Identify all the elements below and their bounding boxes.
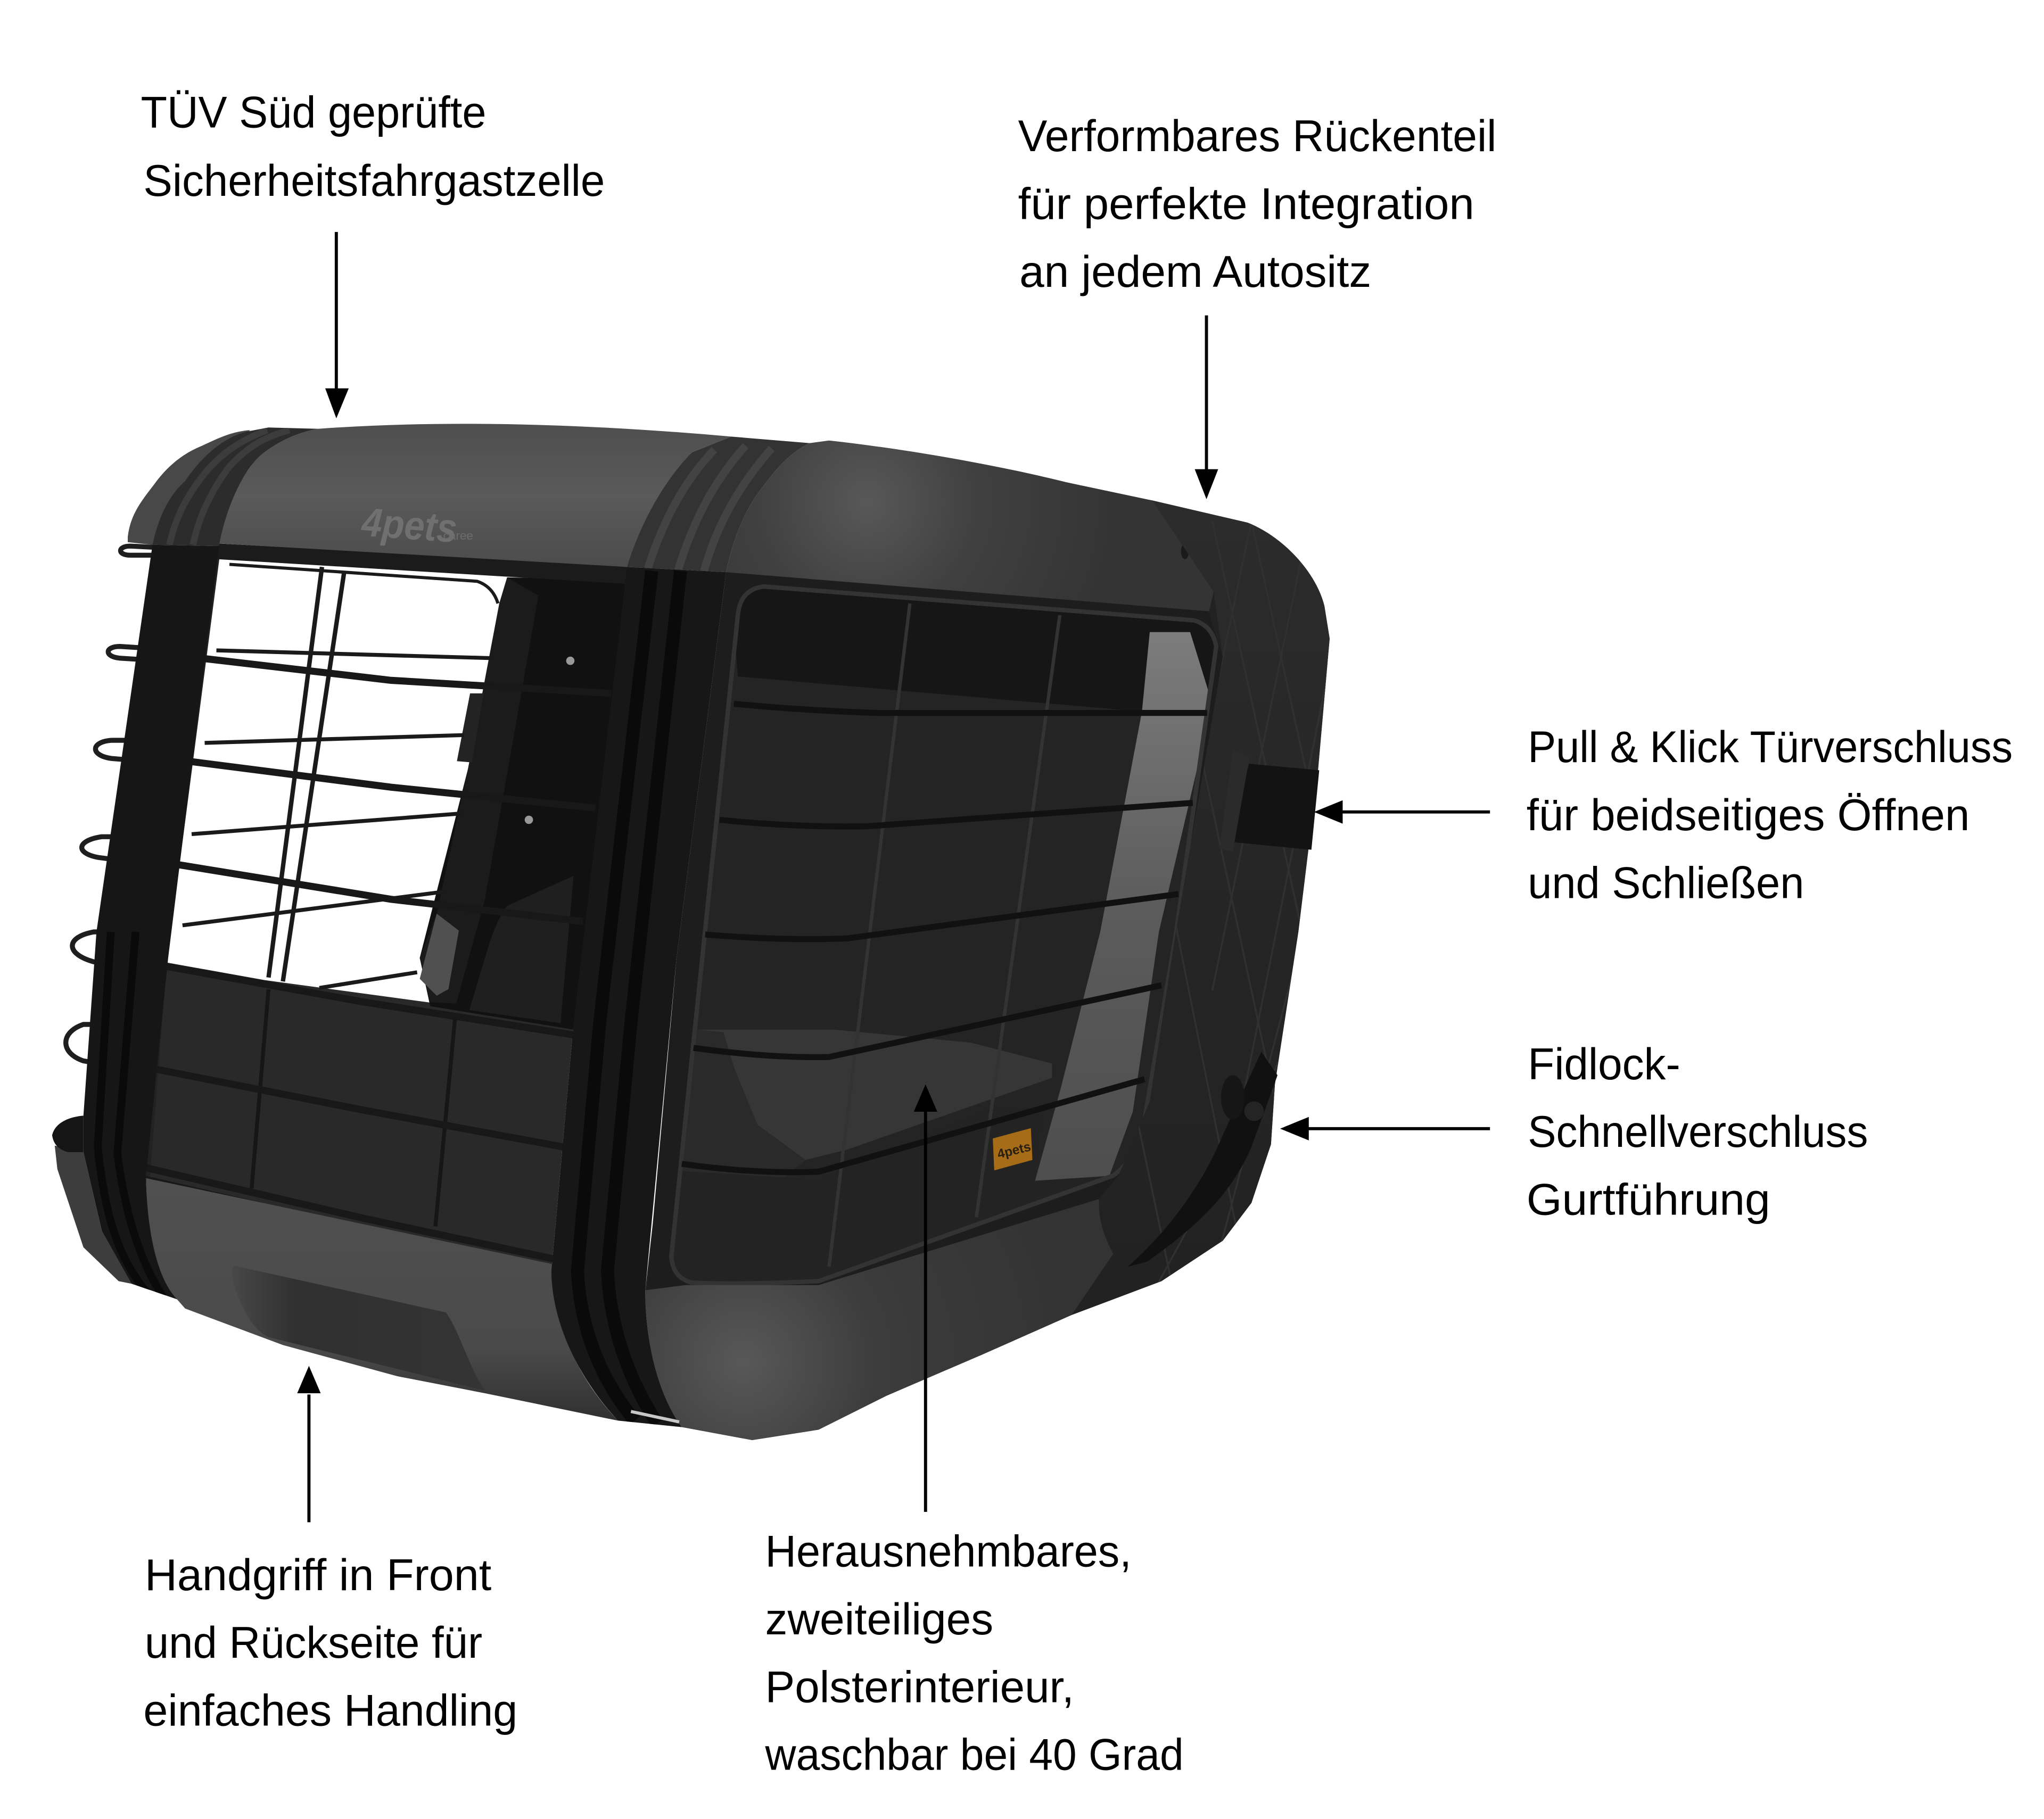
rear grille bars seen through window <box>183 564 498 988</box>
arrow: to handle <box>297 1366 320 1522</box>
small vent hole <box>1181 543 1189 559</box>
label: removable cushion: Polsterinterieur, <box>765 1661 1074 1711</box>
label: pull and click door lock: und Schließen <box>1528 857 1804 907</box>
label: handle <box>143 1550 517 1735</box>
left strap band lower <box>84 545 219 1301</box>
door window interior <box>682 632 1208 1181</box>
door and fabric base <box>647 572 1223 1293</box>
label: handle: einfaches Handling <box>143 1685 517 1735</box>
side panel with diamond pattern <box>1072 500 1342 1315</box>
4pets logo: caree <box>443 529 473 542</box>
orange tag: 4pets <box>996 1139 1032 1162</box>
label: Fidlock belt guide <box>1527 1039 1868 1224</box>
metal sliver at the base <box>631 1411 679 1422</box>
handle recess <box>232 1266 485 1391</box>
right bottom grey panel <box>645 1199 1113 1440</box>
crate illustration <box>52 424 1342 1440</box>
arrow: to safety cell <box>325 232 349 418</box>
front grille horizontal bars <box>146 658 612 1268</box>
left strap band upper <box>153 427 318 546</box>
label: pull and click door lock <box>1527 722 2013 907</box>
left bottom corner and clip <box>52 1115 131 1284</box>
label: deformable back panel: an jedem Autositz <box>1019 246 1371 296</box>
label: TÜV Süd certified cell: Sicherheitsfahrgastzelle <box>143 155 605 205</box>
interior pillar behind the front window <box>420 577 628 1030</box>
right side underlay <box>645 443 1330 1382</box>
door frame <box>671 586 1216 1284</box>
label: pull and click door lock: für beidseitiges Öffnen <box>1527 790 1969 840</box>
label: Fidlock belt guide: Fidlock- <box>1528 1039 1680 1089</box>
arrow: to back panel <box>1194 316 1218 499</box>
centre strap band lower <box>551 567 726 1427</box>
label: deformable back panel: für perfekte Integration <box>1018 178 1474 228</box>
label: deformable back panel: Verformbares Rückenteil <box>1018 111 1496 161</box>
arrow: to pull strap <box>1314 800 1490 824</box>
label: deformable back panel <box>1018 111 1496 296</box>
label: removable cushion <box>765 1526 1184 1780</box>
label: Fidlock belt guide: Gurtführung <box>1527 1174 1770 1224</box>
front lower panel fabric <box>146 962 574 1271</box>
right top grey panel <box>726 441 1214 611</box>
centre strap band upper <box>627 436 810 572</box>
Fidlock strap and buckle <box>1127 1052 1278 1267</box>
pull strap door lock <box>1219 749 1319 851</box>
side loops of the front grille <box>66 546 156 1063</box>
arrow: to Fidlock buckle <box>1280 1117 1490 1140</box>
label: pull and click door lock: Pull & Klick Türverschluss <box>1528 722 2013 772</box>
door grille vertical bars <box>829 603 1060 1267</box>
label: removable cushion: zweiteiliges <box>765 1594 993 1644</box>
label: handle: Handgriff in Front <box>145 1550 491 1600</box>
front window frame <box>146 551 455 1227</box>
front bottom panel <box>146 1178 618 1420</box>
label: removable cushion: waschbar bei 40 Grad <box>765 1730 1184 1780</box>
label: handle: und Rückseite für <box>145 1617 482 1667</box>
strip under the top panel <box>217 543 627 584</box>
left grey cap <box>128 430 250 545</box>
4pets logo: 4pets <box>359 500 458 551</box>
top grey panel <box>219 424 731 567</box>
orange tag <box>993 1128 1033 1170</box>
arrow: to cushion <box>914 1085 937 1512</box>
label: TÜV Süd certified cell: TÜV Süd geprüfte <box>141 87 486 137</box>
label: removable cushion: Herausnehmbares, <box>765 1526 1132 1576</box>
label: Fidlock belt guide: Schnellverschluss <box>1528 1106 1868 1156</box>
cushion <box>696 1030 1052 1160</box>
label: TÜV Süd certified cell <box>141 87 605 205</box>
door grille horizontal bars <box>682 704 1207 1172</box>
